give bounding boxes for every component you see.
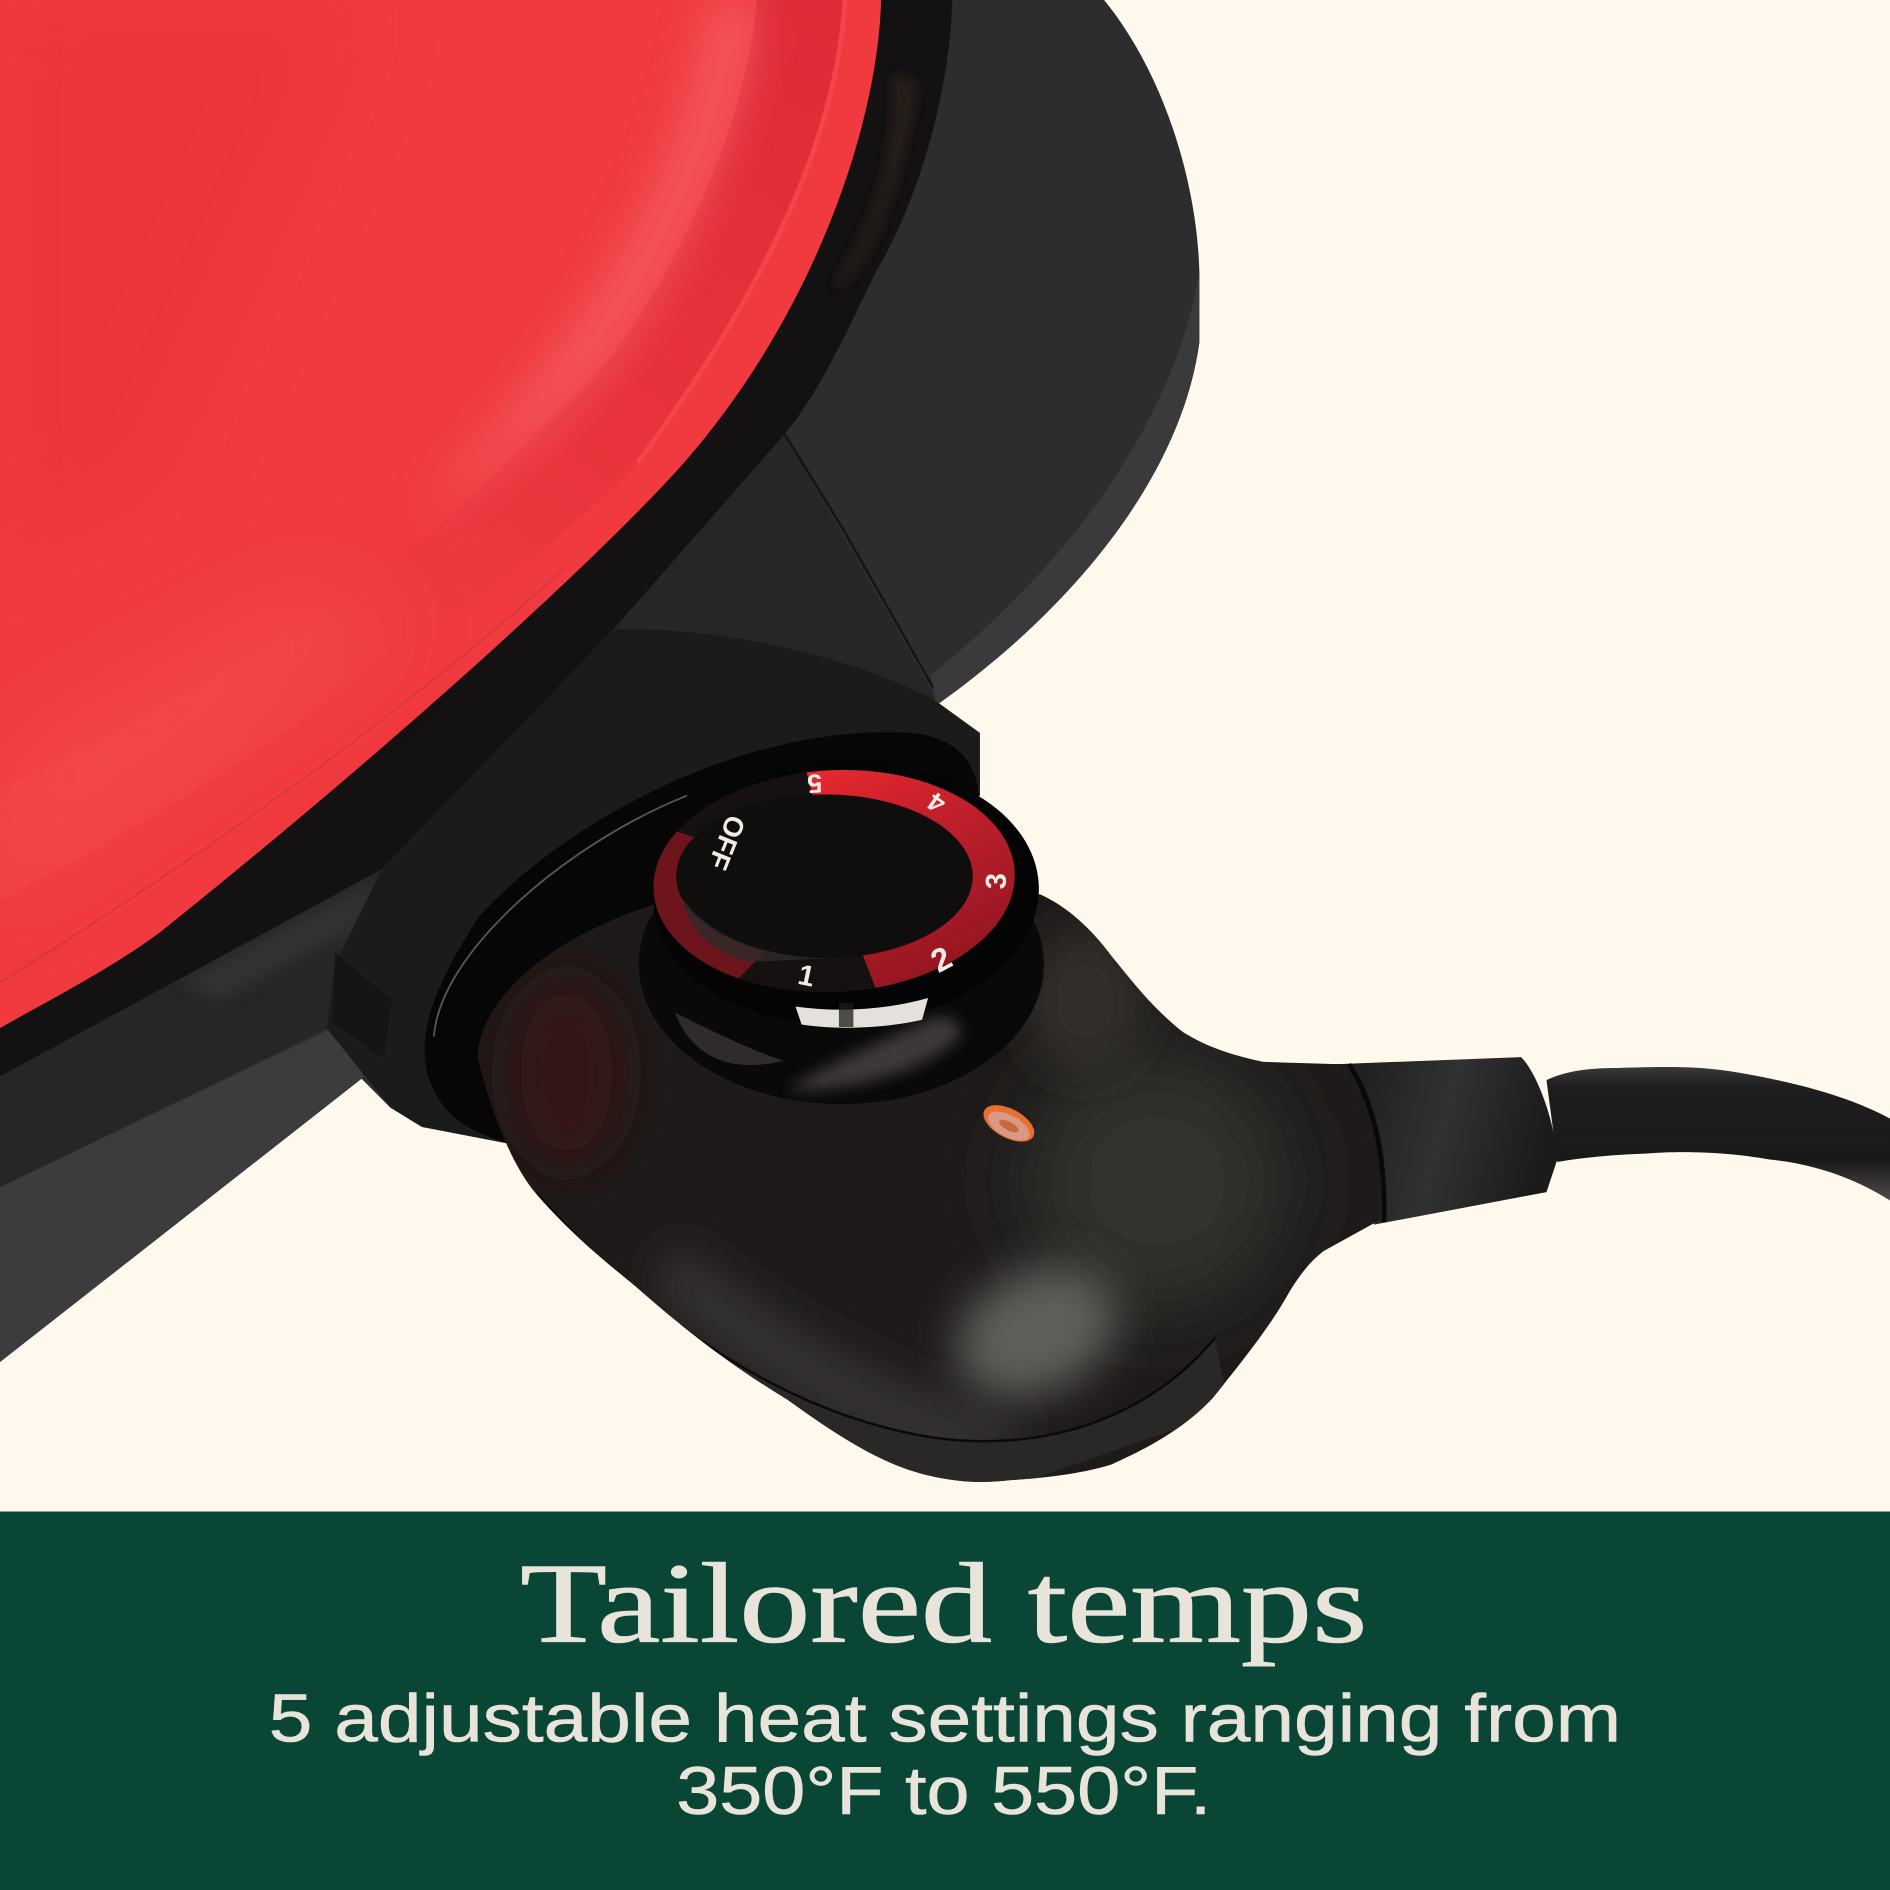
dial label OFF: OFF	[702, 811, 752, 874]
body to relief seam	[1349, 1064, 1384, 1222]
dial label 2: 2	[925, 939, 958, 980]
dial label 1: 1	[795, 959, 818, 994]
power cord strain relief	[1332, 1057, 1557, 1225]
base front rim	[0, 1027, 364, 1362]
collar inner opening	[424, 732, 979, 1144]
dial skirt	[639, 824, 1044, 1104]
dial face	[648, 761, 1020, 1001]
dial rim	[647, 754, 1046, 1034]
dial label 4: 4	[922, 786, 951, 819]
dial lower black glossy band	[738, 956, 876, 988]
power cord	[1546, 1067, 1890, 1201]
title: Tailored temps	[520, 1540, 1367, 1667]
dial skirt reflection	[786, 1017, 960, 1091]
dark groove	[0, 0, 952, 1076]
plate dark band	[0, 0, 845, 900]
dial label 5: 5	[806, 768, 823, 799]
collar around control	[327, 629, 980, 1144]
collar notch	[333, 952, 392, 1058]
body shading	[506, 928, 1290, 1495]
plate soft highlight	[422, 0, 757, 518]
dial centre disc	[676, 794, 973, 958]
seam area of base	[614, 434, 937, 705]
dial red arc	[806, 770, 1015, 988]
dial side highlight	[796, 998, 928, 1028]
base outer rim sliver	[931, 271, 1199, 705]
dial label 3: 3	[981, 873, 1013, 890]
caption band	[0, 1512, 1890, 1890]
subtitle line 1: 5 adjustable heat settings ranging from	[269, 1682, 1621, 1757]
temperature dial	[639, 770, 1044, 1104]
dial left red reflection	[654, 832, 764, 978]
plate thin edge line	[638, 0, 845, 463]
red griddle plate	[0, 0, 881, 1028]
control probe body	[477, 894, 1384, 1495]
base top lower left surface	[0, 869, 382, 1187]
subtitle line 2: 350°F to 550°F.	[676, 1754, 1211, 1829]
indicator light	[978, 1098, 1040, 1149]
griddle base	[0, 0, 1199, 1362]
